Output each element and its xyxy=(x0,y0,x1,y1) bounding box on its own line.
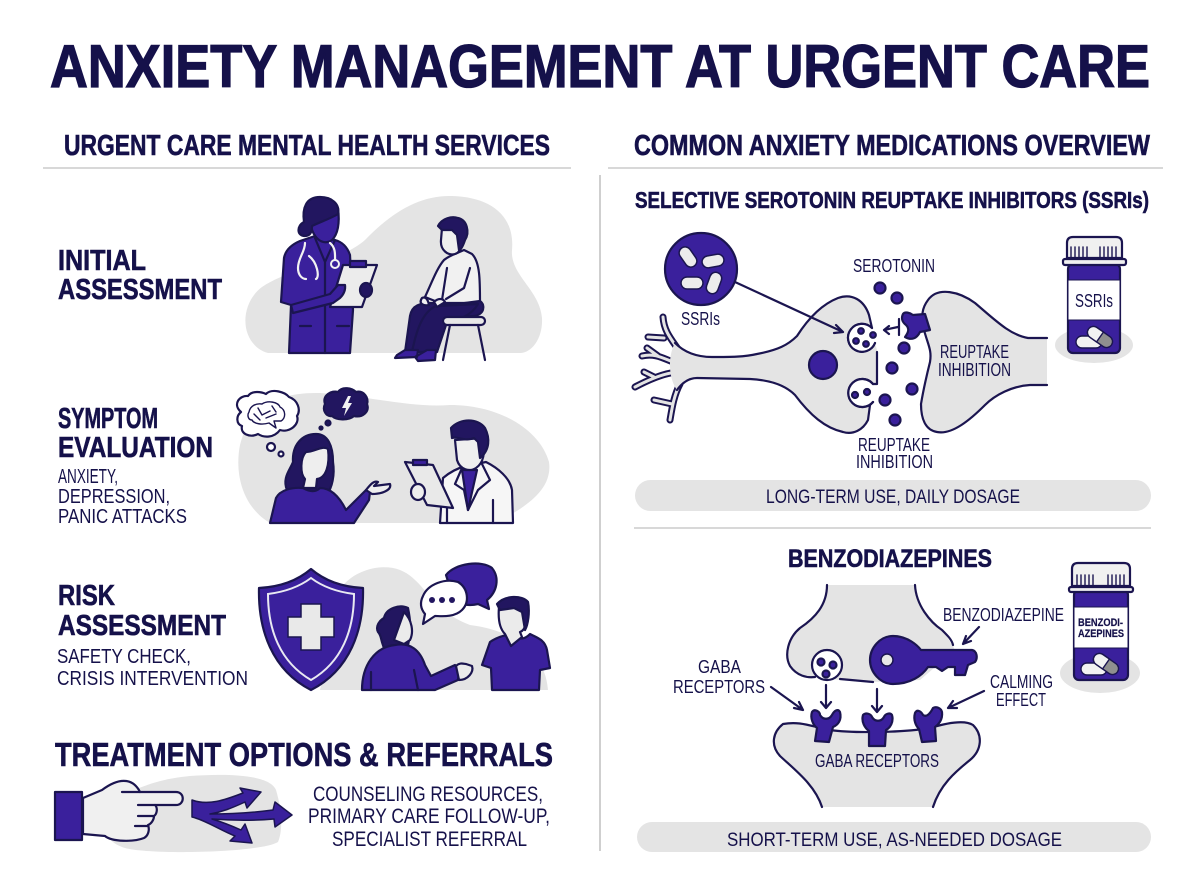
icon: medical shield xyxy=(259,569,363,690)
text: risk assessment heading xyxy=(58,580,226,642)
clinician with clipboard xyxy=(405,420,513,523)
illustration: patient and clinician talking xyxy=(237,388,549,523)
seated patient xyxy=(395,217,485,361)
labels: GABA synapse: RECEPTORS xyxy=(673,677,765,697)
icon: benzodiazepines pill bottle: BENZODI- xyxy=(1078,617,1123,629)
diagram: serotonin synapse xyxy=(635,233,1047,472)
text: referral options: PRIMARY CARE FOLLOW-UP, xyxy=(308,805,550,828)
labels: synapse xyxy=(681,256,1011,472)
panel: urgent care mental health services xyxy=(55,130,553,852)
woman speaking xyxy=(362,606,472,690)
text: symptom list: ANXIETY, xyxy=(58,466,118,488)
text: referral options xyxy=(308,783,550,851)
text: risk details xyxy=(57,646,248,690)
section: risk assessment xyxy=(57,564,550,690)
presynaptic neuron xyxy=(635,296,877,433)
icon: benzodiazepines pill bottle xyxy=(1060,563,1140,693)
thought cloud: brain xyxy=(237,391,299,456)
text: symptom list: PANIC ATTACKS xyxy=(58,506,187,528)
speech bubbles xyxy=(421,564,497,624)
icon: SSRIs pill bottle: SSRIs xyxy=(1075,291,1113,311)
icon: pointing hand xyxy=(55,781,183,841)
thought cloud: lightning xyxy=(320,388,368,430)
labels: synapse: REUPTAKE xyxy=(940,342,1009,362)
text: risk details: SAFETY CHECK, xyxy=(57,646,191,668)
labels: GABA synapse: GABA RECEPTORS xyxy=(815,751,939,771)
icon: benzodiazepines pill bottle: AZEPINES xyxy=(1078,628,1124,640)
text: symptom evaluation heading: EVALUATION xyxy=(58,432,213,464)
receptors xyxy=(811,707,942,746)
vesicle xyxy=(812,650,842,680)
man listening xyxy=(482,597,550,690)
icon: SSRI pills circle xyxy=(665,233,737,305)
text: initial assessment heading xyxy=(58,245,222,306)
inhibition arrow xyxy=(884,319,899,335)
illustration: doctor with seated patient xyxy=(245,196,542,361)
icon: key xyxy=(870,636,977,684)
arrows: GABA pathway xyxy=(771,627,984,712)
lower neuron xyxy=(774,722,980,807)
section: initial assessment xyxy=(58,196,542,361)
labels: synapse: SSRIs xyxy=(681,309,720,329)
serotonin molecules xyxy=(874,282,918,426)
labels: GABA synapse: EFFECT xyxy=(996,690,1046,710)
arrow: pills to vesicle xyxy=(735,282,843,333)
text: referral options: SPECIALIST REFERRAL xyxy=(332,828,527,851)
icon: branching arrows xyxy=(192,788,292,843)
text: symptom list: DEPRESSION, xyxy=(58,486,170,508)
vesicles xyxy=(848,324,876,407)
panel: common anxiety medications overview xyxy=(634,130,1151,852)
labels: GABA synapse xyxy=(673,605,1064,771)
postsynaptic neuron xyxy=(921,292,1047,432)
text: referral options: COUNSELING RESOURCES, xyxy=(313,783,543,806)
section: treatment options and referrals xyxy=(55,736,553,852)
upper neuron xyxy=(787,585,955,682)
text: symptom list xyxy=(58,466,187,528)
heading: treatment options: TREATMENT OPTIONS & REFERRALS xyxy=(55,736,553,773)
text: initial assessment heading: ASSESSMENT xyxy=(58,274,222,306)
labels: synapse: INHIBITION xyxy=(856,452,933,472)
heading: services: URGENT CARE MENTAL HEALTH SERVICES xyxy=(64,130,550,162)
text: risk assessment heading: ASSESSMENT xyxy=(58,610,226,642)
illustration: shield and conversation xyxy=(259,564,550,690)
woman patient xyxy=(270,434,390,523)
labels: GABA synapse: CALMING xyxy=(990,672,1053,692)
labels: synapse: INHIBITION xyxy=(938,360,1011,380)
note: SSRI usage xyxy=(635,480,1151,511)
section: benzodiazepines xyxy=(637,545,1151,852)
text: symptom evaluation heading xyxy=(58,403,213,464)
text: risk details: CRISIS INTERVENTION xyxy=(57,668,248,690)
labels: synapse: SEROTONIN xyxy=(853,256,935,276)
doctor xyxy=(281,197,377,353)
icon: SSRIs pill bottle xyxy=(1055,237,1133,363)
labels: GABA synapse: GABA xyxy=(698,657,741,677)
note: SSRI usage: LONG-TERM USE, DAILY DOSAGE xyxy=(766,487,1020,508)
text: risk assessment heading: RISK xyxy=(58,580,115,612)
text: initial assessment heading: INITIAL xyxy=(58,245,146,277)
section: symptom evaluation xyxy=(58,388,549,528)
diagram: GABA synapse xyxy=(673,585,1064,807)
text: symptom evaluation heading: SYMPTOM xyxy=(58,403,158,435)
labels: GABA synapse: BENZODIAZEPINE xyxy=(943,605,1064,625)
heading: benzodiazepines: BENZODIAZEPINES xyxy=(788,545,992,573)
labels: synapse: REUPTAKE xyxy=(858,435,930,455)
section: SSRIs xyxy=(635,187,1151,511)
receptor xyxy=(902,312,930,339)
note: benzodiazepine usage xyxy=(637,822,1151,852)
illustration: pointing hand and branching arrows xyxy=(55,775,292,852)
note: benzodiazepine usage: SHORT-TERM USE, AS-NEEDED DOSAGE xyxy=(727,830,1062,851)
